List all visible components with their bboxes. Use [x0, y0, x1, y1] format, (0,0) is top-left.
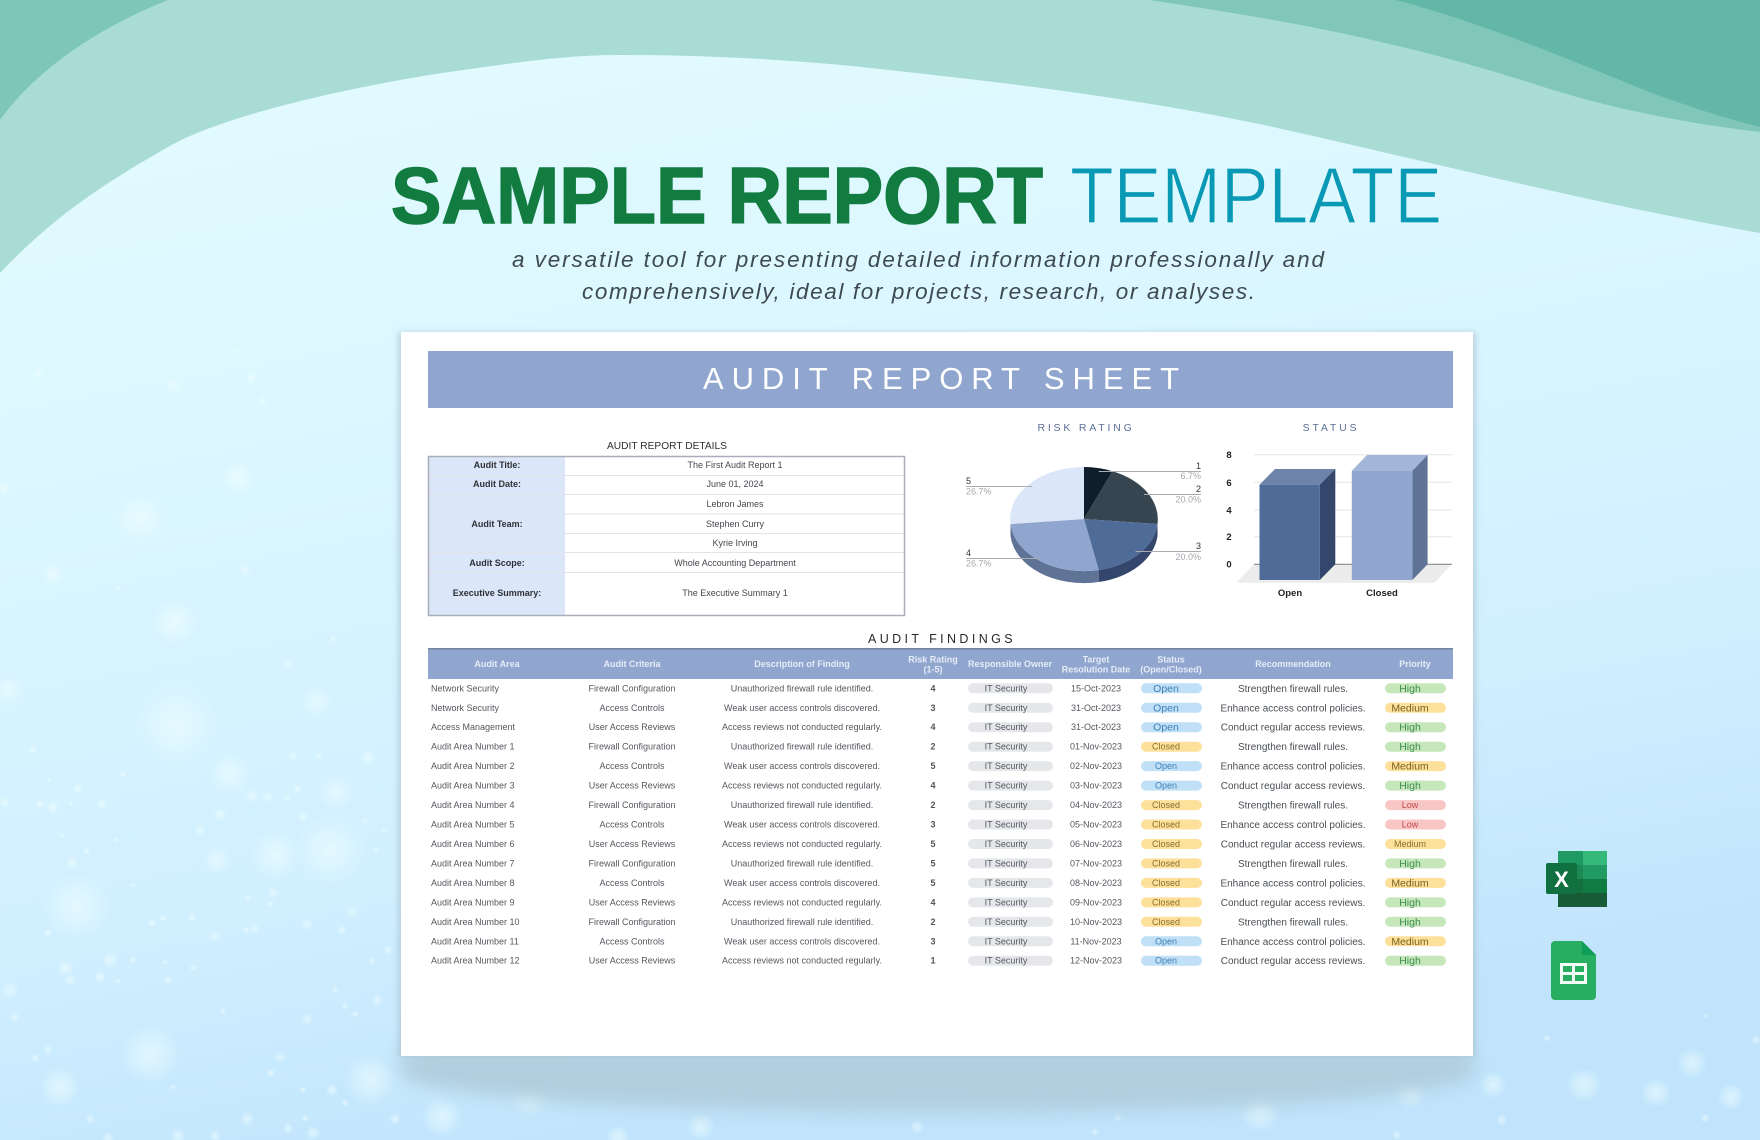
row 11: 08-Nov-2023: [1070, 878, 1122, 888]
wave: top right dark: [1396, 0, 1760, 127]
row 9: Medium: [1394, 839, 1426, 849]
row 15: User Access Reviews: [589, 956, 676, 966]
bar chart: status: Closed: [1366, 588, 1398, 599]
row 5: Access Controls: [599, 761, 665, 771]
details table: Audit Title:: [474, 460, 520, 470]
pie chart: risk rating: 1: [1196, 461, 1201, 471]
pie chart: risk rating: 6.7%: [1180, 471, 1201, 481]
status heading: STATUS: [1303, 422, 1359, 434]
row 12: Conduct regular access reviews.: [1221, 898, 1365, 909]
findings table header: Audit Area: [474, 659, 521, 669]
details table: Whole Accounting Department: [674, 558, 796, 568]
details table: The First Audit Report 1: [687, 460, 783, 470]
row 7: [431, 800, 1446, 812]
row 12: Audit Area Number 9: [431, 897, 515, 907]
row 14: Audit Area Number 11: [431, 936, 519, 946]
row 13: Closed: [1152, 917, 1180, 927]
pie chart: risk rating: 2: [1196, 484, 1201, 494]
row 1: Unauthorized firewall rule identified.: [731, 683, 873, 693]
bar chart: status: 6: [1226, 478, 1232, 489]
row 4: Audit Area Number 1: [431, 742, 515, 752]
row 4: [431, 741, 1446, 753]
row 2: 31-Oct-2023: [1071, 703, 1121, 713]
row 13: [431, 916, 1446, 928]
row 2: IT Security: [985, 703, 1028, 713]
row 3: High: [1399, 722, 1421, 734]
row 6: Audit Area Number 3: [431, 781, 515, 791]
row 13: Unauthorized firewall rule identified.: [731, 917, 873, 927]
row 1: High: [1399, 683, 1421, 695]
row 2: Medium: [1391, 702, 1429, 714]
row 12: IT Security: [985, 897, 1028, 907]
row 8: Closed: [1152, 820, 1180, 830]
subtitle: [512, 247, 1325, 304]
row 10: High: [1399, 858, 1421, 870]
row 15: Audit Area Number 12: [431, 956, 520, 966]
row 12: User Access Reviews: [589, 897, 676, 907]
row 3: Access Management: [431, 722, 516, 732]
row 1: Open: [1153, 683, 1179, 695]
row 15: 12-Nov-2023: [1070, 956, 1122, 966]
details table: Audit Scope:: [469, 558, 525, 568]
row 4: High: [1399, 741, 1421, 753]
wave: top right mid: [1149, 0, 1760, 132]
row 12: 4: [930, 897, 936, 907]
row 15: 1: [930, 956, 936, 966]
row 13: Firewall Configuration: [588, 917, 676, 927]
details table: Kyrie Irving: [712, 538, 758, 548]
findings table header: Risk Rating: [908, 654, 958, 664]
findings table header: (Open/Closed): [1140, 664, 1202, 674]
row 1: 4: [930, 683, 936, 693]
pie chart: risk rating: 26.7%: [966, 486, 992, 496]
row 7: Strengthen firewall rules.: [1238, 801, 1348, 812]
wave: top left corner: [0, 0, 168, 120]
details table: [428, 456, 905, 616]
details table: Audit Date:: [473, 479, 521, 489]
row 14: Open: [1155, 936, 1177, 946]
row 14: Medium: [1391, 936, 1429, 948]
row 14: Enhance access control policies.: [1220, 937, 1366, 948]
row 3: 4: [930, 722, 936, 732]
row 8: Audit Area Number 5: [431, 820, 515, 830]
row 10: Firewall Configuration: [588, 858, 676, 868]
row 7: Firewall Configuration: [588, 800, 676, 810]
bar chart: status: 0: [1226, 560, 1232, 570]
row 9: [431, 839, 1446, 850]
row 4: Closed: [1152, 742, 1180, 752]
row 10: [431, 858, 1446, 870]
findings table rows: [431, 683, 1446, 967]
row 11: IT Security: [985, 878, 1028, 888]
row 2: Network Security: [431, 703, 500, 713]
row 5: Weak user access controls discovered.: [724, 761, 880, 771]
row 12: High: [1399, 897, 1421, 909]
row 14: Weak user access controls discovered.: [724, 936, 880, 946]
bar chart: status: [1226, 450, 1452, 599]
risk rating heading: RISK RATING: [1037, 422, 1135, 434]
title: [391, 151, 1442, 240]
row 11: Medium: [1391, 877, 1429, 889]
row 9: IT Security: [985, 839, 1028, 849]
row 7: 04-Nov-2023: [1070, 800, 1122, 810]
subtitle: comprehensively, ideal for projects, research, or analyses.: [582, 279, 1255, 304]
row 12: [431, 897, 1446, 909]
row 15: Open: [1155, 956, 1177, 966]
row 6: Conduct regular access reviews.: [1221, 781, 1365, 792]
icon: excel: X: [1554, 867, 1569, 892]
row 4: Firewall Configuration: [588, 742, 676, 752]
row 5: IT Security: [985, 761, 1028, 771]
row 10: IT Security: [985, 858, 1028, 868]
row 1: IT Security: [985, 683, 1028, 693]
row 1: Strengthen firewall rules.: [1238, 684, 1348, 695]
row 13: 10-Nov-2023: [1070, 917, 1122, 927]
row 6: 4: [930, 781, 936, 791]
details table: The Executive Summary 1: [682, 588, 788, 598]
pie chart: risk rating: 20.0%: [1175, 494, 1201, 504]
row 11: [431, 877, 1446, 889]
row 9: 5: [930, 839, 936, 849]
title: SAMPLE REPORT: [391, 151, 1043, 240]
row 2: Weak user access controls discovered.: [724, 703, 880, 713]
row 3: Access reviews not conducted regularly.: [722, 722, 882, 732]
row 5: Open: [1155, 761, 1177, 771]
row 8: IT Security: [985, 820, 1028, 830]
row 10: 07-Nov-2023: [1070, 858, 1122, 868]
row 13: IT Security: [985, 917, 1028, 927]
row 10: 5: [930, 858, 936, 868]
row 2: [431, 702, 1446, 714]
row 5: 5: [930, 761, 936, 771]
row 8: [431, 820, 1446, 831]
bar chart: status: 8: [1226, 450, 1232, 461]
row 3: 31-Oct-2023: [1071, 722, 1121, 732]
pie chart: risk rating: 26.7%: [966, 558, 992, 568]
row 6: Open: [1155, 781, 1177, 791]
row 14: IT Security: [985, 936, 1028, 946]
row 14: Access Controls: [599, 936, 665, 946]
findings table header: Status: [1157, 654, 1185, 664]
row 13: High: [1399, 916, 1421, 928]
row 8: Access Controls: [599, 820, 665, 830]
pie chart: risk rating: 3: [1196, 541, 1201, 551]
details table: Lebron James: [706, 499, 764, 509]
bar chart: status: Open: [1278, 588, 1302, 599]
row 11: Closed: [1152, 878, 1180, 888]
card shadow: [398, 332, 1476, 1112]
findings table header: Recommendation: [1255, 659, 1331, 669]
row 4: Unauthorized firewall rule identified.: [731, 742, 873, 752]
row 3: Open: [1153, 722, 1179, 734]
row 14: 3: [930, 936, 936, 946]
row 13: Strengthen firewall rules.: [1238, 917, 1348, 928]
row 15: IT Security: [985, 956, 1028, 966]
row 1: 15-Oct-2023: [1071, 683, 1121, 693]
row 7: Closed: [1152, 800, 1180, 810]
row 15: High: [1399, 955, 1421, 967]
row 15: [431, 955, 1446, 967]
row 1: Network Security: [431, 683, 500, 693]
pie chart: risk rating: 5: [966, 476, 971, 486]
row 11: Access Controls: [599, 878, 665, 888]
details table: Audit Team:: [471, 519, 523, 529]
row 8: 3: [930, 820, 936, 830]
row 2: Access Controls: [599, 703, 665, 713]
findings table header: Description of Finding: [754, 659, 850, 669]
bar chart: status: 4: [1226, 506, 1232, 516]
details table: Executive Summary:: [453, 588, 541, 598]
details heading: AUDIT REPORT DETAILS: [607, 440, 727, 452]
row 2: Enhance access control policies.: [1220, 703, 1366, 714]
sheet banner: AUDIT REPORT SHEET: [703, 361, 1179, 396]
row 8: Weak user access controls discovered.: [724, 820, 880, 830]
row 9: Audit Area Number 6: [431, 839, 515, 849]
title: TEMPLATE: [1070, 151, 1442, 240]
row 4: IT Security: [985, 742, 1028, 752]
row 3: Conduct regular access reviews.: [1221, 723, 1365, 734]
icon: google sheets: [1551, 941, 1596, 1000]
row 6: IT Security: [985, 781, 1028, 791]
pie chart: risk rating: 20.0%: [1175, 552, 1201, 562]
findings table header: (1-5): [923, 664, 943, 674]
row 12: 09-Nov-2023: [1070, 897, 1122, 907]
row 14: [431, 936, 1446, 948]
findings heading: AUDIT FINDINGS: [868, 632, 1016, 646]
row 1: [431, 683, 1446, 695]
details table: June 01, 2024: [706, 479, 764, 489]
row 1: Firewall Configuration: [588, 683, 676, 693]
row 6: 03-Nov-2023: [1070, 781, 1122, 791]
subtitle: a versatile tool for presenting detailed information professionally and: [512, 247, 1325, 272]
row 2: 3: [930, 703, 936, 713]
row 9: User Access Reviews: [589, 839, 676, 849]
findings table header: Priority: [1399, 659, 1431, 669]
row 10: Unauthorized firewall rule identified.: [731, 858, 873, 868]
row 11: Enhance access control policies.: [1220, 878, 1366, 889]
row 13: Audit Area Number 10: [431, 917, 520, 927]
row 7: Unauthorized firewall rule identified.: [731, 800, 873, 810]
row 10: Strengthen firewall rules.: [1238, 859, 1348, 870]
row 7: Audit Area Number 4: [431, 800, 515, 810]
row 14: 11-Nov-2023: [1070, 936, 1122, 946]
row 4: Strengthen firewall rules.: [1238, 742, 1348, 753]
panel: audit report sheet: [401, 332, 1473, 1056]
row 8: Low: [1402, 820, 1419, 830]
findings table header: Target: [1083, 654, 1109, 664]
row 15: Conduct regular access reviews.: [1221, 956, 1365, 967]
row 7: Low: [1402, 800, 1419, 810]
row 7: IT Security: [985, 800, 1028, 810]
row 6: High: [1399, 780, 1421, 792]
row 10: Audit Area Number 7: [431, 858, 515, 868]
bar chart: status: 2: [1226, 532, 1232, 543]
row 5: Audit Area Number 2: [431, 761, 515, 771]
findings table header: Resolution Date: [1062, 664, 1130, 674]
row 15: Access reviews not conducted regularly.: [722, 956, 882, 966]
row 6: User Access Reviews: [589, 781, 676, 791]
row 9: Conduct regular access reviews.: [1221, 840, 1365, 850]
findings table header: Responsible Owner: [968, 659, 1053, 669]
bar: closed: [1352, 455, 1428, 580]
row 8: Enhance access control policies.: [1220, 820, 1366, 831]
row 10: Closed: [1152, 858, 1180, 868]
pie chart: risk rating: 4: [966, 548, 971, 558]
pie chart: risk rating: [966, 461, 1201, 583]
row 3: [431, 722, 1446, 734]
row 6: [431, 780, 1446, 792]
bar: open: [1260, 469, 1335, 580]
row 4: 01-Nov-2023: [1070, 742, 1122, 752]
row 11: Audit Area Number 8: [431, 878, 515, 888]
row 6: Access reviews not conducted regularly.: [722, 781, 882, 791]
row 12: Closed: [1152, 897, 1180, 907]
row 3: IT Security: [985, 722, 1028, 732]
findings table header: Audit Criteria: [603, 659, 661, 669]
row 12: Access reviews not conducted regularly.: [722, 897, 882, 907]
row 2: Open: [1153, 702, 1179, 714]
sheet banner: [428, 351, 1453, 408]
row 13: 2: [930, 917, 936, 927]
findings table header: [428, 648, 1453, 679]
row 5: 02-Nov-2023: [1070, 761, 1122, 771]
row 8: 05-Nov-2023: [1070, 820, 1122, 830]
row 11: 5: [930, 878, 936, 888]
row 7: 2: [930, 800, 936, 810]
row 3: User Access Reviews: [589, 722, 676, 732]
row 9: Closed: [1152, 839, 1180, 849]
row 11: Weak user access controls discovered.: [724, 878, 880, 888]
wave: light teal top band: [0, 0, 1760, 273]
row 5: Medium: [1391, 761, 1429, 773]
details table: Stephen Curry: [706, 519, 765, 529]
row 5: Enhance access control policies.: [1220, 762, 1366, 773]
icon: excel: [1546, 851, 1607, 907]
row 5: [431, 761, 1446, 773]
row 9: 06-Nov-2023: [1070, 839, 1122, 849]
row 4: 2: [930, 742, 936, 752]
row 9: Access reviews not conducted regularly.: [722, 839, 882, 849]
